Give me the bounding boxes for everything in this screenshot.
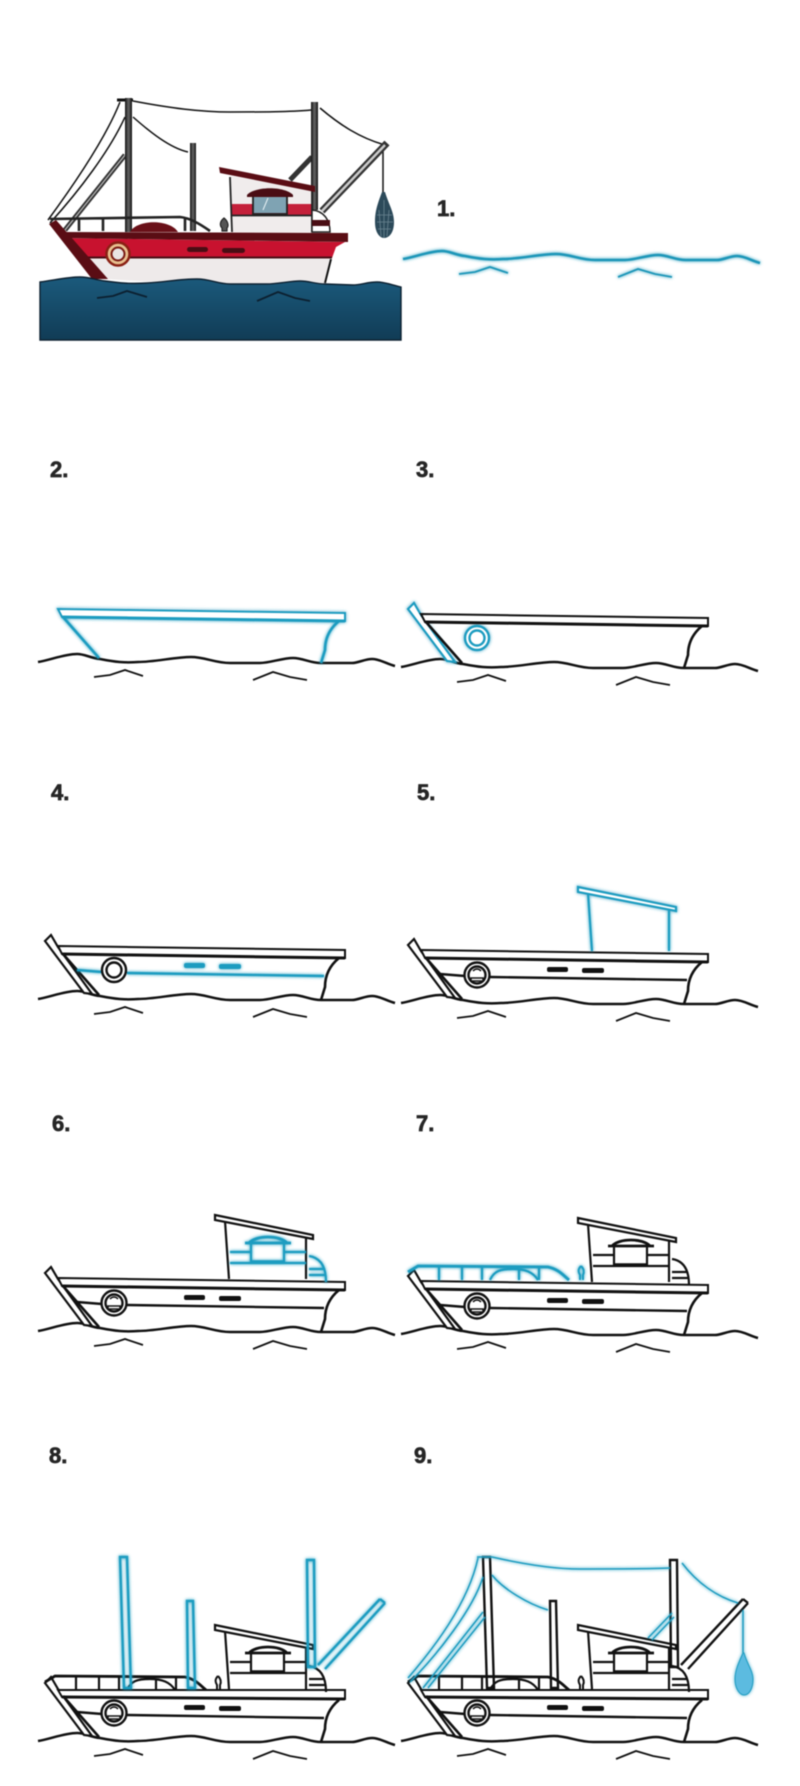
hull <box>49 220 348 284</box>
cabin <box>219 167 330 232</box>
step 8 label: 8. <box>49 1443 67 1468</box>
panel: finished coloured boat <box>40 98 401 340</box>
step 4 label: 4. <box>51 780 69 805</box>
mast and rigging wires <box>48 100 387 230</box>
icon: deck winch <box>220 218 228 231</box>
step 3 label: 3. <box>416 457 434 482</box>
icon: life ring <box>106 242 130 266</box>
step 5: cabin frame <box>401 887 758 1021</box>
step 9 label: 9. <box>414 1443 432 1468</box>
step 5 label: 5. <box>417 780 435 805</box>
step 7 label: 7. <box>416 1111 434 1136</box>
step 1 label: 1. <box>437 196 455 221</box>
step 2 label: 2. <box>50 457 68 482</box>
bow railing <box>50 217 210 232</box>
icon: net bag <box>375 192 394 238</box>
masts <box>125 98 318 232</box>
step 2: hull outline <box>38 609 395 680</box>
step 7: railing and winch <box>401 1218 758 1352</box>
step 4: stripe and hull windows <box>38 935 395 1017</box>
sea <box>40 277 401 340</box>
step 9: rigging and net <box>401 1557 758 1759</box>
step 6: cabin front <box>38 1215 395 1349</box>
hull windows <box>187 247 245 253</box>
step 3: bow post and ring <box>401 603 758 685</box>
step 1: blue water line <box>403 251 760 277</box>
step 8: masts and boom <box>38 1557 395 1759</box>
step 6 label: 6. <box>52 1111 70 1136</box>
